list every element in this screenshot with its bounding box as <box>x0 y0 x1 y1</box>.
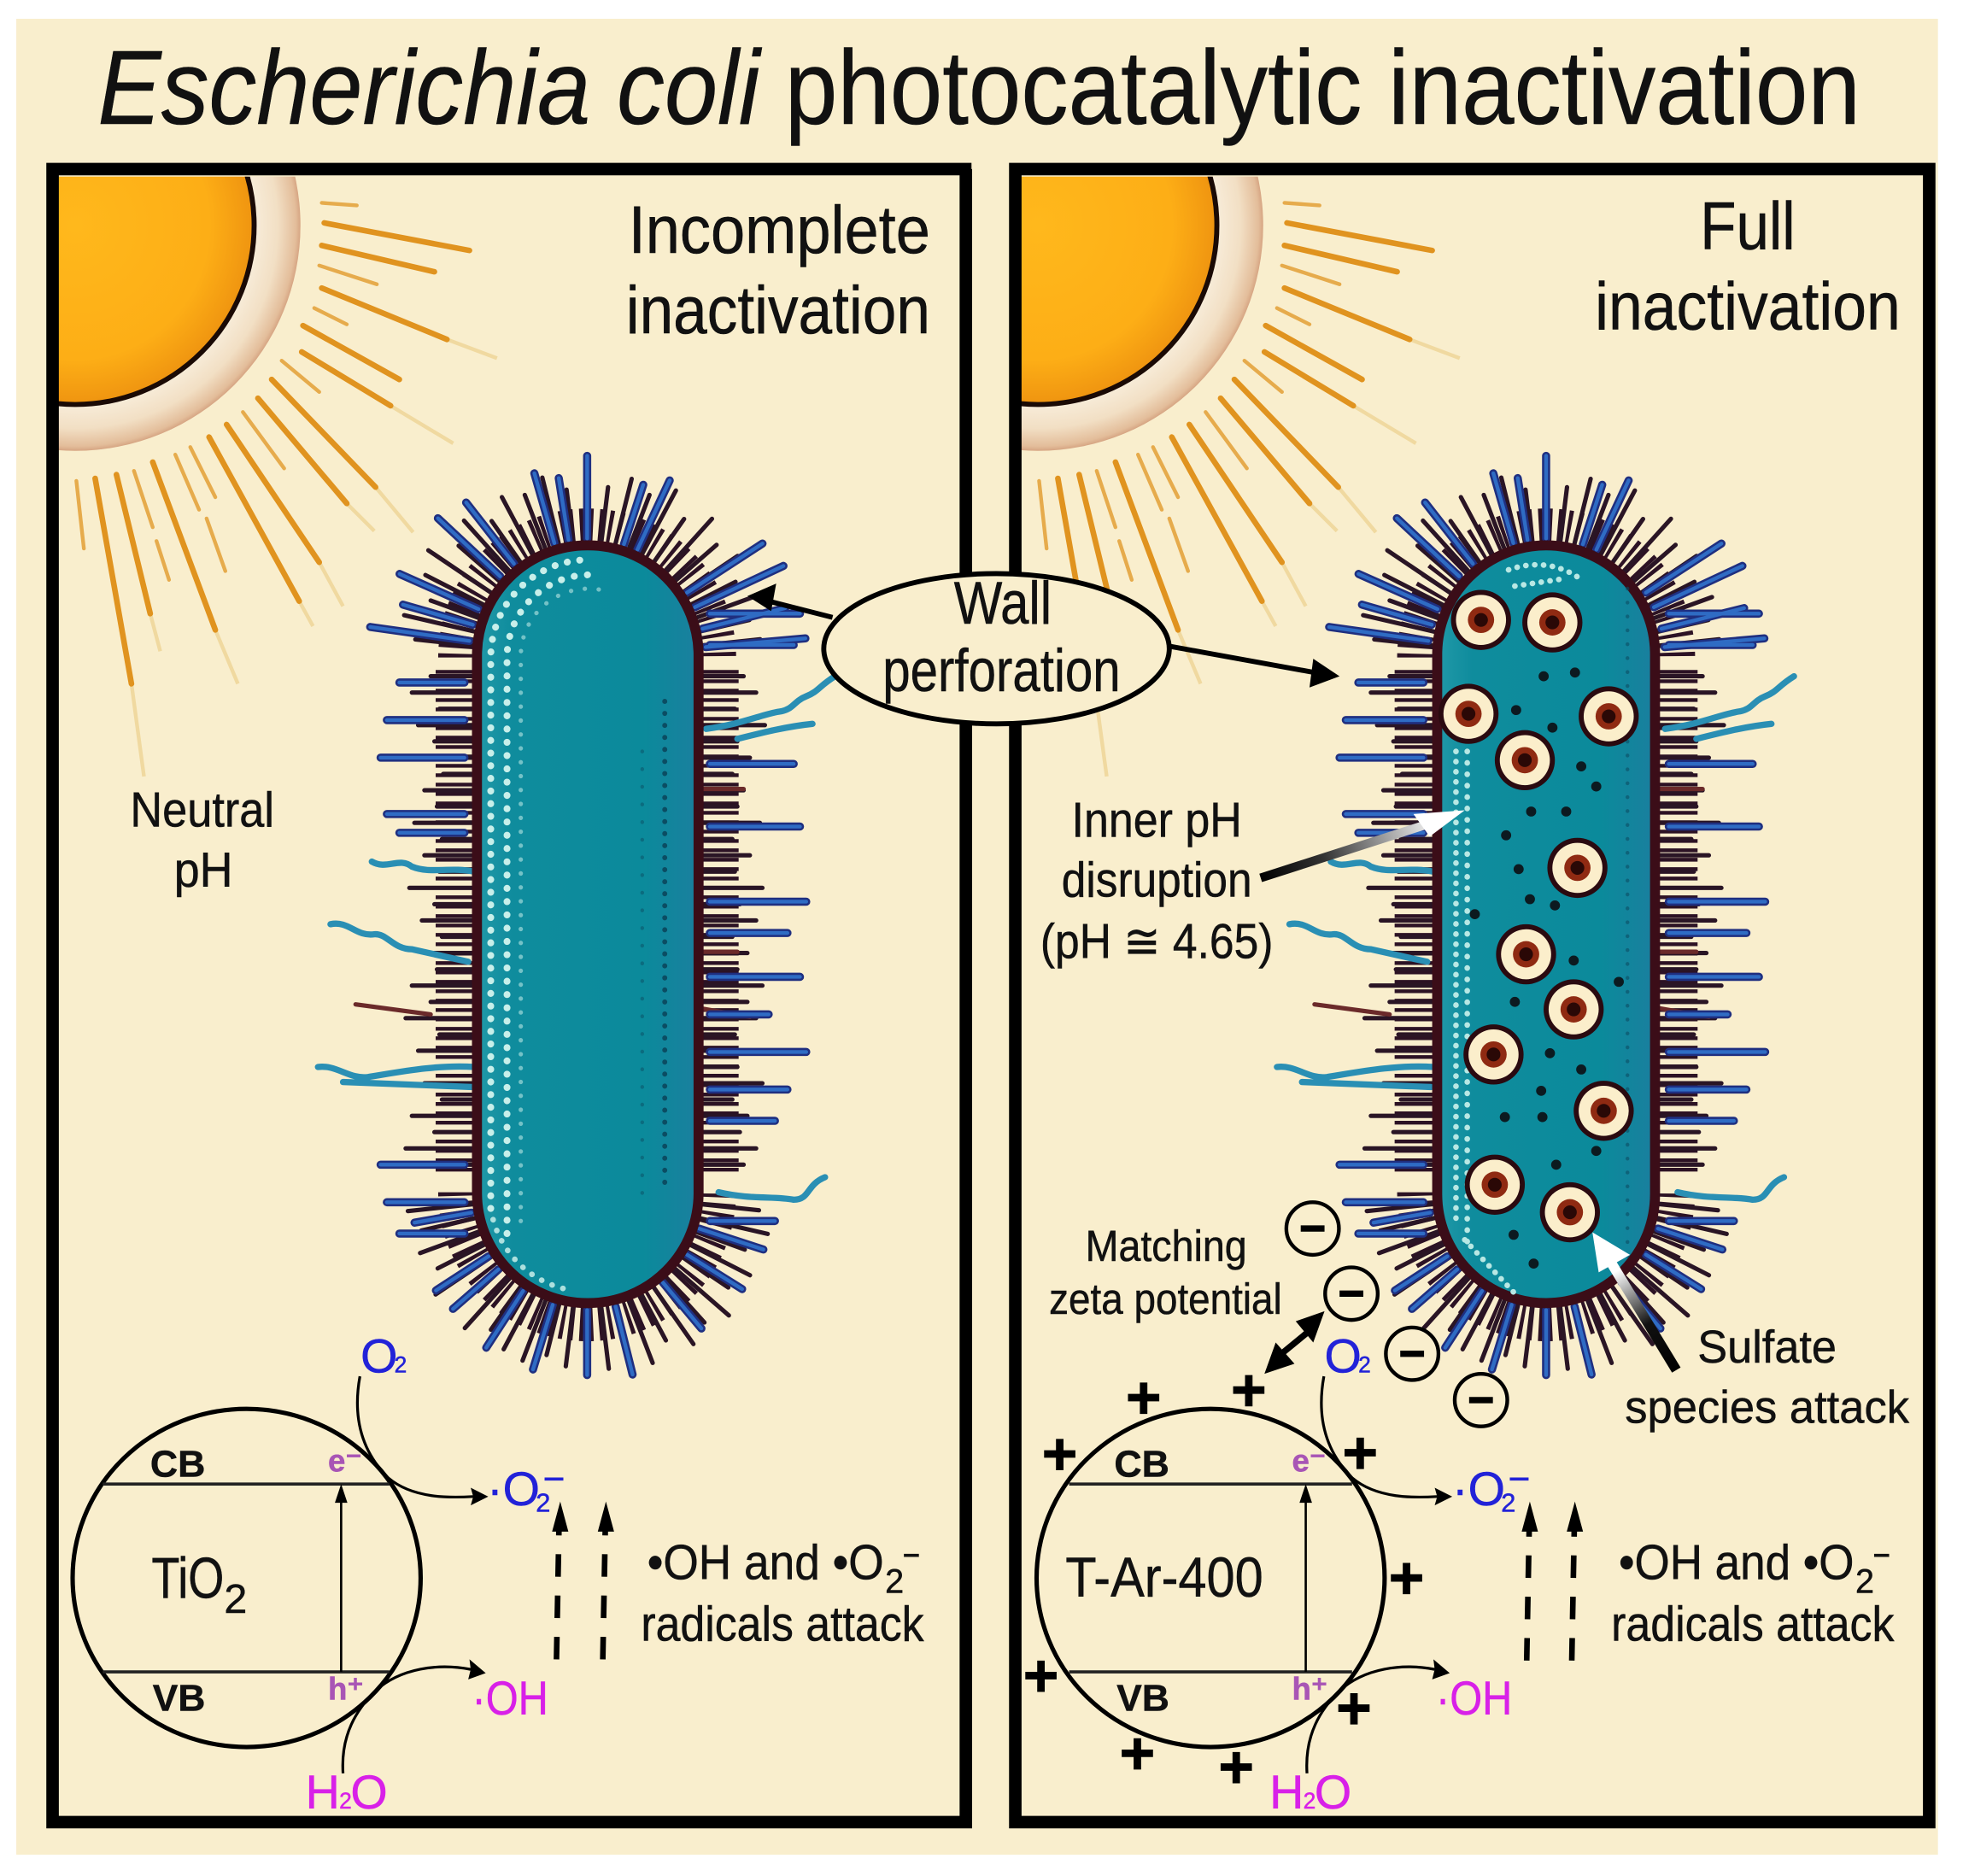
heading: incomplete inactivation: Incomplete <box>629 191 930 267</box>
diagram: H2O oxidation: ·OH <box>472 1672 548 1725</box>
panel: full inactivation sun <box>1022 176 1461 777</box>
label: sulfate species attack <box>1625 1322 1910 1433</box>
label: inner pH disruption: Inner pH <box>1072 793 1242 847</box>
heading: full inactivation: Full <box>1700 188 1796 264</box>
diagram: H2O oxidation right: H <box>1269 1766 1304 1819</box>
diagram: TiO2 band scheme: 2 <box>224 1576 247 1622</box>
diagram: O2 reduction: O <box>360 1330 397 1383</box>
bacterium: intact E. coli <box>318 456 835 1375</box>
label: radicals attack right: radicals attack <box>1611 1597 1895 1651</box>
diagram: H2O oxidation right: 2 <box>1304 1788 1316 1814</box>
diagram: TiO2 band scheme: VB <box>153 1677 205 1719</box>
diagram: O2 reduction right: 2 <box>1501 1487 1515 1517</box>
label: sulfate species attack: Sulfate <box>1697 1322 1837 1373</box>
title: Escherichia coli <box>97 30 763 147</box>
diagram: TiO2 band scheme: CB <box>150 1443 205 1485</box>
callout: wall perforation: Wall <box>954 569 1052 636</box>
diagram: O2 reduction right: O <box>1325 1330 1362 1383</box>
diagram: H2O oxidation: H <box>306 1766 340 1819</box>
label: radicals attack right: 2 <box>1855 1563 1874 1601</box>
label: radicals attack left: radicals attack <box>641 1597 924 1651</box>
arrows: dashed radicals left <box>552 1502 614 1659</box>
panel: incomplete inactivation sun <box>58 176 497 777</box>
label: neutral pH: Neutral <box>130 783 274 838</box>
diagram: T-Ar-400 band scheme: VB <box>1116 1677 1169 1719</box>
arrow: zeta potential double arrow <box>1264 1311 1325 1374</box>
diagram: H2O oxidation right <box>1269 1659 1512 1819</box>
arrow: inner pH gradient <box>1261 810 1465 878</box>
arrows: dashed radicals right <box>1521 1502 1583 1661</box>
label: neutral pH: pH <box>174 843 233 898</box>
negative charges <box>1286 1202 1508 1427</box>
arrow: sulfate attack gradient <box>1592 1232 1676 1370</box>
label: matching zeta potential: zeta potential <box>1049 1275 1282 1323</box>
diagram: H2O oxidation right: ·OH <box>1436 1672 1512 1725</box>
label: radicals attack left <box>641 1536 924 1651</box>
heading: incomplete inactivation: inactivation <box>626 272 930 348</box>
diagram: TiO2 band scheme: e⁻ <box>328 1443 362 1478</box>
callout: wall perforation: perforation <box>882 636 1121 704</box>
diagram: TiO2 band scheme <box>73 1409 420 1747</box>
callout: wall perforation <box>747 569 1339 724</box>
diagram: O2 reduction: 2 <box>536 1487 550 1517</box>
diagram: H2O oxidation <box>306 1659 548 1819</box>
label: radicals attack left: •OH and •O <box>647 1536 884 1591</box>
diagram: TiO2 band scheme: h⁺ <box>328 1671 364 1706</box>
diagram: O2 reduction right <box>1321 1330 1528 1517</box>
label: radicals attack left: 2 <box>885 1563 904 1601</box>
heading: incomplete inactivation <box>626 191 930 348</box>
small dark dots <box>1474 672 1619 1263</box>
diagram: T-Ar-400 band scheme: e⁻ <box>1292 1443 1326 1478</box>
diagram: H2O oxidation right: O <box>1315 1766 1351 1819</box>
label: neutral pH <box>130 783 274 898</box>
label: inner pH disruption: (pH ≅ 4.65) <box>1040 914 1273 969</box>
diagram: T-Ar-400 band scheme: CB <box>1114 1443 1169 1485</box>
diagram: T-Ar-400 band scheme <box>1036 1409 1385 1747</box>
label: matching zeta potential: Matching <box>1086 1222 1247 1270</box>
diagram: O2 reduction right: 2 <box>1358 1352 1371 1378</box>
label: matching zeta potential <box>1049 1222 1282 1323</box>
label: radicals attack right: •OH and •O <box>1619 1536 1854 1591</box>
diagram: H2O oxidation: 2 <box>339 1788 352 1814</box>
title <box>97 30 1860 147</box>
diagram: T-Ar-400 band scheme: h⁺ <box>1292 1671 1327 1706</box>
diagram: O2 reduction <box>357 1330 564 1517</box>
panel: T-Ar-400 frame <box>1009 169 1936 1822</box>
perforation holes <box>1439 589 1638 1242</box>
label: inner pH disruption: disruption <box>1062 853 1252 908</box>
diagram: T-Ar-400 band scheme: T-Ar-400 <box>1065 1545 1263 1609</box>
diagram: O2 reduction: ·O <box>487 1463 540 1515</box>
arrow: wall perforation to left cell <box>759 599 833 618</box>
panel: TiO2 frame <box>46 169 971 1822</box>
positive charges <box>1025 1375 1422 1784</box>
diagram: O2 reduction: 2 <box>395 1352 407 1378</box>
label: sulfate species attack: species attack <box>1625 1381 1910 1433</box>
diagram: TiO2 band scheme: TiO <box>151 1547 224 1611</box>
bacterium: perforated E. coli <box>1277 456 1794 1375</box>
label: inner pH disruption <box>1040 793 1273 969</box>
heading: full inactivation: inactivation <box>1595 268 1901 344</box>
diagram: O2 reduction right: ·O <box>1452 1463 1505 1515</box>
heading: full inactivation <box>1595 188 1901 344</box>
title: photocatalytic inactivation <box>785 30 1860 147</box>
label: radicals attack right <box>1611 1536 1895 1651</box>
diagram: H2O oxidation: O <box>350 1766 388 1819</box>
